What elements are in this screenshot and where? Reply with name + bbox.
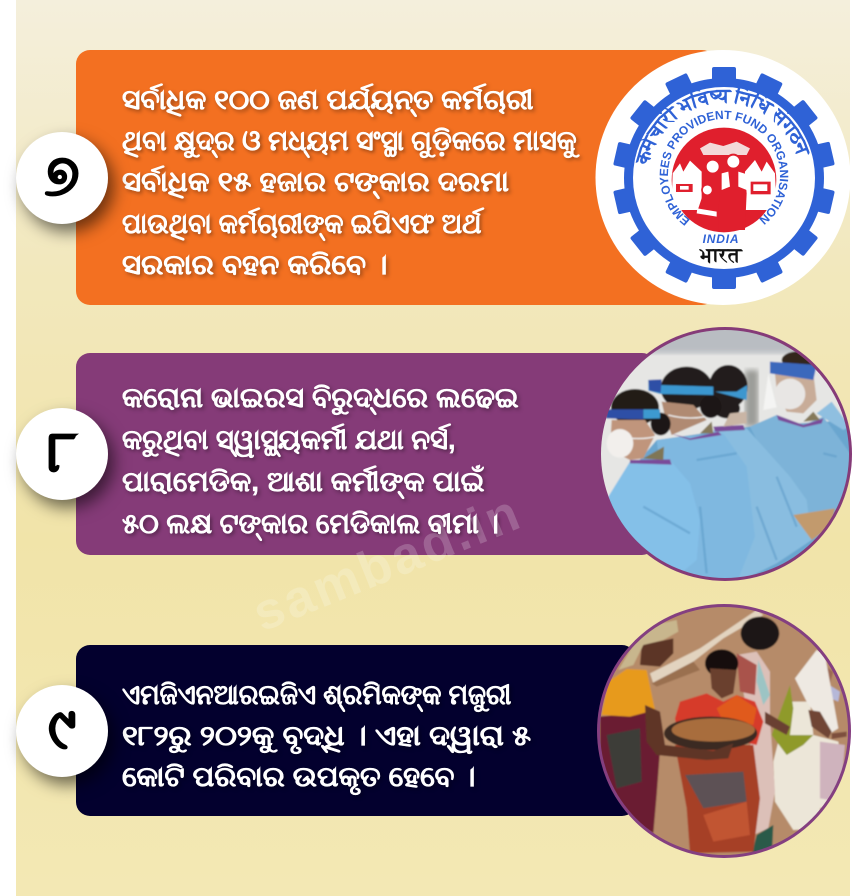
text block: item 7 xyxy=(122,83,582,280)
icon: EPFO logo xyxy=(596,50,850,305)
illustrations: logo and photos xyxy=(257,50,852,858)
panel: item 9 navy box xyxy=(76,645,636,816)
back woman xyxy=(741,617,779,650)
text block: item 7: ସରକାର ବହନ କରିବେ । xyxy=(122,249,387,280)
badge: number 9 xyxy=(16,685,108,777)
base gown mass xyxy=(608,420,852,587)
text block: item 9 xyxy=(122,679,531,796)
text block: item 8: ପାରାମେଡିକ, ଆଶା କର୍ମୀଙ୍କ ପାଇଁ xyxy=(122,466,485,497)
workers (zoom-space shapes) xyxy=(750,415,850,517)
gear ring with teeth xyxy=(613,67,835,289)
red emblem xyxy=(672,128,776,232)
left woman xyxy=(600,712,662,833)
photo: health workers in blue gowns xyxy=(590,320,852,587)
text block: item 8 xyxy=(122,382,520,544)
text block: item 8: କରୁଥିବା ସ୍ୱାସ୍ଥ୍ୟକର୍ମୀ ଯଥା ନର୍ସ, xyxy=(122,424,456,455)
logo text arcs: INDIA xyxy=(703,232,739,246)
logo text arcs: भारत xyxy=(698,245,744,267)
text block: item 7: ପାଉଥିବା କର୍ମଚାରୀଙ୍କ ଇପିଏଫ ଅର୍ଥ xyxy=(122,208,481,239)
text block: item 7: ସର୍ବାଧିକ ୧୫ ହଜାର ଟଙ୍କାର ଦରମା xyxy=(122,166,509,197)
gown folds xyxy=(643,453,837,573)
text block: item 7: ଥିବା କ୍ଷୁଦ୍ର ଓ ମଧ୍ୟମ ସଂସ୍ଥା ଗୁଡ଼ିକରେ ମାସକୁ xyxy=(122,125,577,156)
panel: item 7 orange box xyxy=(76,50,716,305)
badge: number 7: ୭ xyxy=(45,144,79,208)
text block: item 9: କୋଟି ପରିବାର ଉପକୃତ ହେବେ । xyxy=(122,761,475,792)
text block: item 9: ୧୮୨ରୁ ୨୦୨କୁ ବୃଦ୍ଧି । ଏହା ଦ୍ୱାରା ୫ xyxy=(122,720,531,751)
right woman xyxy=(830,685,841,702)
logo text arcs: EMPLOYEES PROVIDENT FUND ORGANISATION xyxy=(660,110,788,226)
basin of soil xyxy=(664,717,757,750)
panel: item 8 purple box xyxy=(76,353,656,555)
watermark: sambad.in xyxy=(245,483,530,643)
badge: number 8: ୮ xyxy=(47,420,77,484)
logo text arcs: कर्मचारी भविष्य निधि संगठन xyxy=(636,88,810,164)
badge: number 7 xyxy=(16,132,108,224)
text block: item 7: ସର୍ବାଧିକ ୧୦୦ ଜଣ ପର୍ଯ୍ୟନ୍ତ କର୍ମଚାରୀ xyxy=(122,84,533,115)
logo text arcs xyxy=(636,88,810,267)
photo: women labourers carrying soil xyxy=(590,595,852,862)
text block: item 8: ୫୦ ଲକ୍ଷ ଟଙ୍କାର ମେଡିକାଲ ବୀମା । xyxy=(122,508,499,539)
text block: item 8: କରୋନା ଭାଇରସ ବିରୁଦ୍ଧରେ ଲଢେଇ xyxy=(122,382,519,413)
text block: item 9: ଏମଜିଏନଆରଇଜିଏ ଶ୍ରମିକଙ୍କ ମଜୁରୀ xyxy=(122,679,511,710)
badge: number 9: ୯ xyxy=(48,697,76,761)
heads and hair xyxy=(780,350,812,366)
badge: number 8 xyxy=(16,408,108,500)
logo white disc xyxy=(596,50,850,305)
centre woman xyxy=(705,649,738,677)
